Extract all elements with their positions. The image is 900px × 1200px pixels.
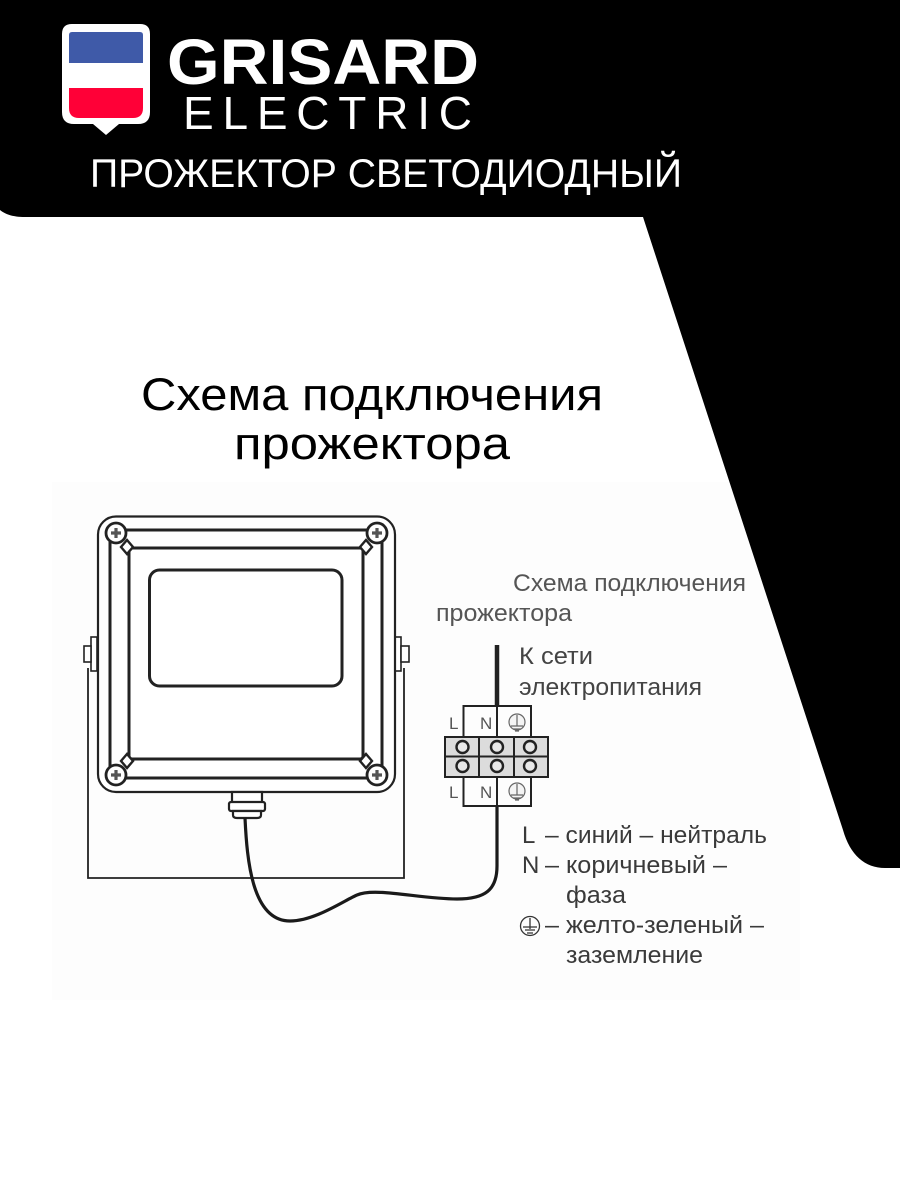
wire colour legend: – коричневый – <box>545 852 728 879</box>
corner braces <box>121 540 372 768</box>
stand bracket <box>88 668 404 878</box>
top ground symbol <box>509 714 525 731</box>
panel: black header with right-side wedge <box>0 0 900 868</box>
connector body <box>445 737 548 777</box>
bottom ground symbol <box>509 783 525 800</box>
wire colour legend: – синий – нейтраль <box>545 822 767 849</box>
connector dividers <box>445 737 548 777</box>
wire colour legend: – желто-зеленый – <box>545 912 765 939</box>
terminal labels <box>449 714 492 802</box>
panel: diagram background <box>52 482 800 1000</box>
mains label: К сети <box>519 643 593 670</box>
wire colour legend <box>522 822 767 969</box>
screw slots <box>111 528 382 780</box>
floodlight drawing <box>84 516 409 878</box>
mains wire <box>495 645 499 706</box>
terminal block <box>445 645 548 806</box>
diagram caption <box>436 570 746 627</box>
terminal labels: N <box>480 783 492 802</box>
terminal labels: N <box>480 714 492 733</box>
terminal labels: L <box>449 783 458 802</box>
mains label <box>519 643 702 701</box>
terminal screws <box>456 741 536 772</box>
top wires <box>464 706 531 740</box>
brand name: GRISARD <box>167 26 479 98</box>
cable gland <box>229 792 265 818</box>
light window <box>150 570 342 686</box>
brand subtitle: ELECTRIC <box>183 87 472 139</box>
header title: ПРОЖЕКТОР СВЕТОДИОДНЫЙ <box>90 150 682 196</box>
terminal labels: L <box>449 714 458 733</box>
heading: line 1: Схема подключения <box>141 369 603 420</box>
legend ground symbol <box>520 916 540 936</box>
bottom wires <box>464 772 531 806</box>
inner frame <box>129 548 363 759</box>
housing outline <box>98 516 395 792</box>
power cable <box>245 806 497 921</box>
diagram caption: прожектора <box>436 600 573 627</box>
logo: shield <box>62 24 150 135</box>
wire colour legend: L <box>522 822 535 849</box>
diagram caption: Схема подключения <box>513 570 746 597</box>
mains label: электропитания <box>519 674 702 701</box>
wire colour legend: фаза <box>566 882 627 909</box>
heading: line 2: прожектора <box>234 418 511 469</box>
outer frame <box>110 530 382 778</box>
corner screws <box>106 523 387 785</box>
left mounting bolt <box>84 637 97 671</box>
wire colour legend: N <box>522 852 539 879</box>
wire colour legend: заземление <box>566 942 703 969</box>
right mounting bolt <box>395 637 409 671</box>
